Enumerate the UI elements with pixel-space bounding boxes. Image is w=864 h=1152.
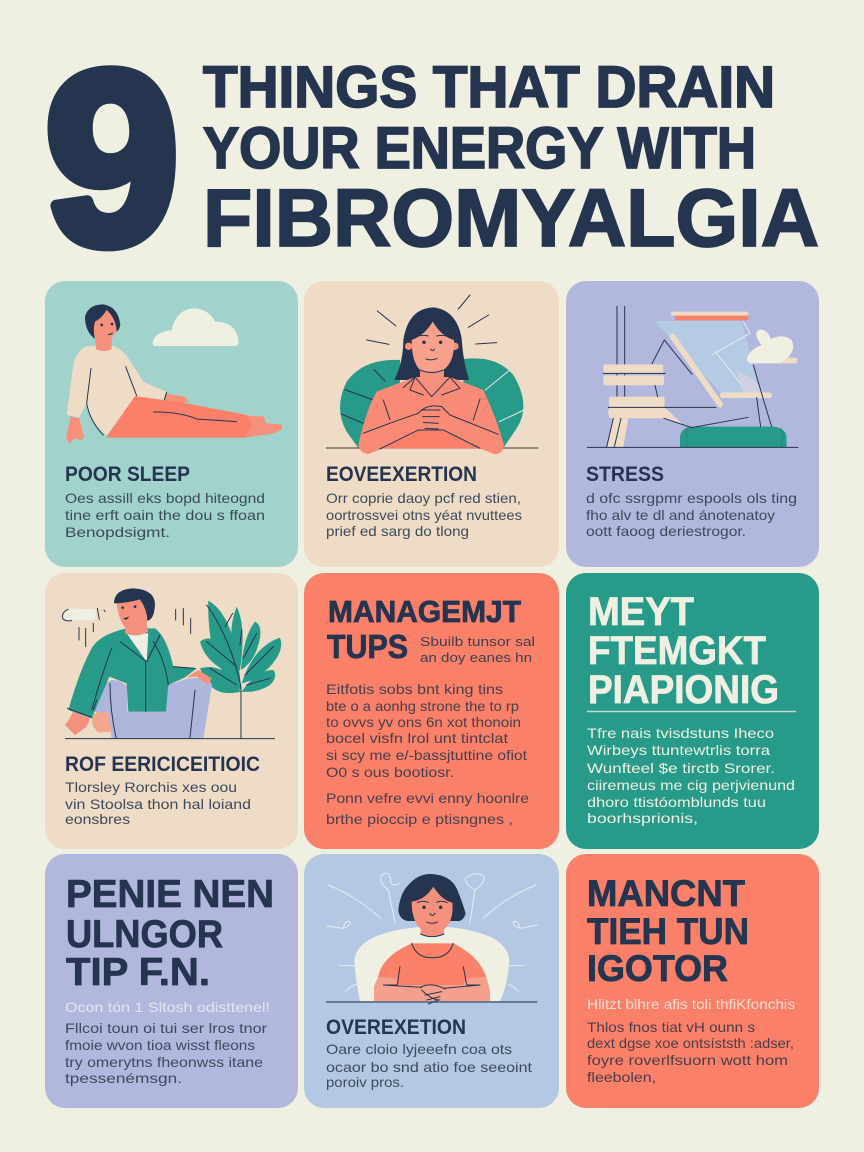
- body text: dhoro ttistóomblunds tuu: [587, 794, 766, 810]
- body text: [587, 725, 795, 826]
- heading: PIAPIONIG: [588, 668, 779, 712]
- body text: try omerytns fheonwss itane: [65, 1054, 263, 1070]
- body text: dext dgse xoe ontsíststh :adser,: [587, 1035, 794, 1051]
- body text: Ponn vefre evvi enny hoonlre: [326, 790, 529, 806]
- panel: penie nen: [45, 854, 298, 1108]
- body text: Fllcoi toun oi tui ser lros tnor: [65, 1020, 267, 1036]
- heading: PENIE NEN: [66, 873, 274, 916]
- heading: STRESS: [586, 463, 664, 486]
- body text: vin Stoolsa thon hal loiand: [65, 796, 251, 812]
- title line 2: YOUR ENERGY WITH: [203, 116, 756, 181]
- body text: Thlos fnos tiat vH ounn s: [587, 1019, 755, 1035]
- body text: [65, 779, 251, 827]
- subheading: Ocon tón 1 Sltosh odisttenel!: [65, 999, 270, 1015]
- panel: meyt ftemgkt: [566, 573, 819, 849]
- heading: ROF EERICICEITIOIC: [65, 753, 260, 776]
- icon: abstract furniture and cloud: [587, 306, 798, 447]
- body text: fmoie wvon tioa wisst fleons: [65, 1037, 255, 1053]
- body text: oortrossvei otns yéat nvuttees: [326, 507, 522, 523]
- body text: [586, 490, 797, 539]
- body text: bocel visfn lrol unt tintclat: [326, 730, 508, 746]
- icon: seated woman with radiating lines: [326, 873, 537, 1004]
- body text: prief ed sarg do tlong: [326, 523, 469, 539]
- body text: Eitfotis sobs bnt king tins: [326, 681, 503, 697]
- subheading: Hlitzt blhre afis toli thfiKfonchis: [587, 996, 795, 1012]
- body text: [65, 1020, 267, 1086]
- body text: ciiremeus me cig perjvienund: [587, 777, 795, 793]
- heading: IGOTOR: [587, 948, 728, 989]
- body text: poroiv pros.: [326, 1074, 404, 1090]
- body text: ocaor bo snd atio foe seeoint: [326, 1059, 532, 1075]
- heading: MANAGEMJT: [328, 594, 521, 629]
- heading: MANCNT: [587, 873, 745, 914]
- body text: tine erft oain the dou s ffoan: [65, 507, 265, 523]
- body text: eonsbres: [65, 811, 130, 827]
- body text: Wirbeys ttuntewtrlis torra: [587, 742, 770, 758]
- body text: Oare cloio lyjeeefn coa ots: [326, 1041, 512, 1057]
- heading: POOR SLEEP: [65, 463, 190, 486]
- body text: to ovvs yv ons 6n xot thonoin: [326, 714, 521, 730]
- body text: fleebolen,: [587, 1069, 656, 1085]
- panel: overexertion: [304, 281, 559, 567]
- title line 1: THINGS THAT DRAIN: [203, 55, 775, 120]
- heading: [588, 590, 779, 712]
- title: [45, 21, 819, 296]
- heading: FTEMGKT: [588, 629, 766, 673]
- heading: TIP F.N.: [66, 951, 210, 994]
- body text: brthe pioccip e ptisngnes ,: [326, 811, 513, 827]
- title line 3: FIBROMYALGIA: [203, 173, 819, 264]
- heading: MEYT: [588, 590, 694, 634]
- body text: tpessenémsgn.: [65, 1070, 182, 1086]
- icon: seated person with plant: [63, 588, 281, 739]
- body text: O0 s ous bootiosr.: [326, 764, 454, 780]
- body text: [326, 1041, 532, 1090]
- heading: OVEREXETION: [326, 1016, 466, 1039]
- body text: foyre roverlfsuorn wott hom: [587, 1052, 788, 1068]
- panel: mancnt: [566, 854, 819, 1108]
- panel: poor sleep: [45, 281, 298, 567]
- side note: Sbuilb tunsor sal: [420, 634, 535, 649]
- body text: si scy me e/-bassjtuttine ofiot: [326, 747, 527, 763]
- panel: overexetion: [304, 854, 559, 1108]
- side note: an doy eanes hn: [420, 650, 532, 665]
- body text: Oes assill eks bopd hiteognd: [65, 490, 265, 506]
- body text: Benopdsigmt.: [65, 524, 170, 540]
- heading: EOVEEXERTION: [326, 463, 477, 486]
- body text: oott faoog deriestrogor.: [586, 523, 746, 539]
- panel: management tips: [304, 573, 559, 849]
- heading: ULNGOR: [66, 913, 223, 956]
- icon: reclining person and cloud: [66, 304, 282, 443]
- heading: TIEH TUN: [587, 911, 749, 952]
- heading: [587, 873, 749, 989]
- big number 9: 9: [45, 21, 179, 296]
- body text: Wunfteel $e tirctb Srorer.: [587, 760, 775, 776]
- side note: [420, 634, 535, 665]
- body text: [326, 681, 529, 827]
- body text: Tlorsley Rorchis xes oou: [65, 779, 237, 795]
- body text: boorhsprionis,: [587, 810, 698, 826]
- body text: bte o a aonhg strone the to rp: [326, 698, 519, 714]
- panel: rof ericiceitioic: [45, 573, 298, 849]
- body text: Orr coprie daoy pcf red stien,: [326, 490, 521, 506]
- panel: stress: [566, 281, 819, 567]
- body text: Tfre nais tvisdstuns Iheco: [587, 725, 774, 741]
- body text: [65, 490, 265, 540]
- body text: d ofc ssrgpmr espools ols ting: [586, 490, 797, 506]
- icon: woman with clasped hands: [326, 295, 538, 454]
- body text: fho alv te dl and ánotenatoy: [586, 507, 775, 523]
- heading: [66, 873, 274, 994]
- body text: [587, 1019, 794, 1085]
- heading line 2: TUPS: [327, 628, 408, 665]
- body text: [326, 490, 522, 539]
